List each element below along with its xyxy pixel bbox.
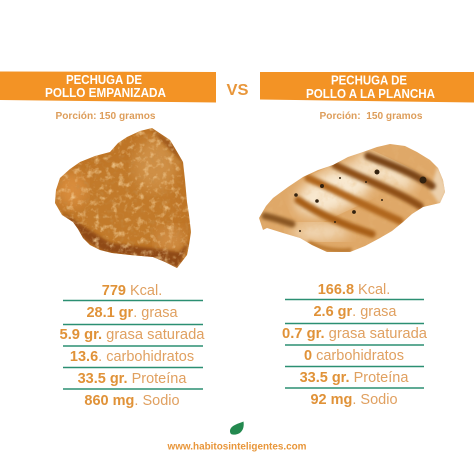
left nutrition list: 33.5 gr. Proteína [78, 371, 187, 387]
left portion label: Porción: 150 gramos [56, 110, 156, 122]
right nutrition list: 166.8 Kcal. [318, 282, 390, 298]
right header banner: POLLO A LA PLANCHA [306, 87, 435, 101]
right nutrition list: 0.7 gr. grasa saturada [282, 326, 428, 342]
breaded chicken image [55, 128, 191, 268]
left nutrition list: 860 mg. Sodio [84, 393, 180, 409]
grill marks [265, 156, 432, 251]
right nutrition list: 92 mg. Sodio [310, 392, 398, 408]
right nutrition list: 33.5 gr. Proteína [300, 370, 409, 386]
left header banner: PECHUGA DE [66, 73, 142, 87]
right nutrition list: 0 carbohidratos [304, 348, 404, 364]
right nutrition list [282, 282, 428, 408]
dark char spots [294, 170, 426, 232]
left nutrition list [60, 283, 205, 409]
right header banner: PECHUGA DE [331, 74, 407, 88]
vs label: VS [226, 82, 248, 99]
left header banner: POLLO EMPANIZADA [45, 86, 166, 100]
website url: www.habitosinteligentes.com [167, 442, 307, 452]
right header banner [260, 72, 474, 102]
right nutrition list: 2.6 gr. grasa [313, 304, 397, 320]
right portion label: Porción: 150 gramos [320, 110, 423, 122]
left header banner [0, 72, 216, 102]
icon: green leaf [230, 422, 244, 435]
left nutrition list: 5.9 gr. grasa saturada [60, 327, 205, 343]
grilled chicken image [259, 144, 445, 252]
left nutrition list: 779 Kcal. [102, 283, 162, 299]
left nutrition list: 13.6. carbohidratos [70, 349, 194, 365]
left nutrition list: 28.1 gr. grasa [86, 305, 178, 321]
